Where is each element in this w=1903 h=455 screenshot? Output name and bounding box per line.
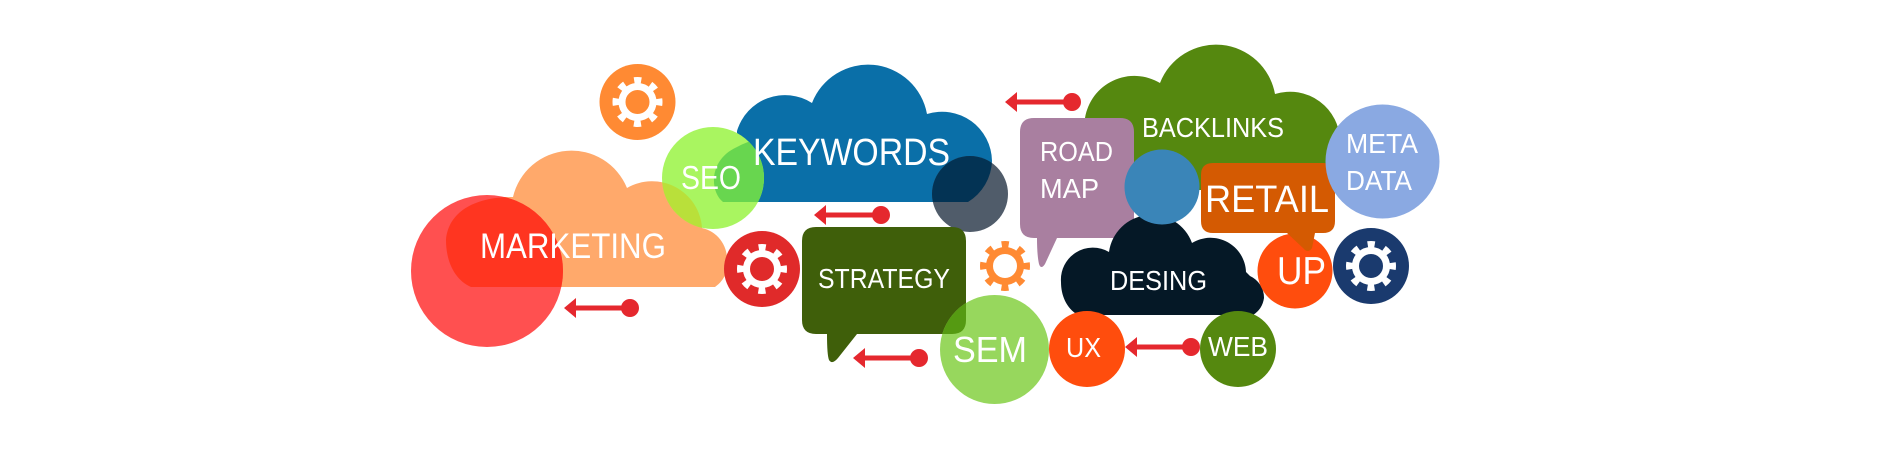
label: ROAD MAP: MAP [1040,173,1099,204]
label: KEYWORDS: KEYWORDS [753,132,950,174]
label: BACKLINKS: BACKLINKS [1142,112,1284,143]
arrow: below marketing [564,298,639,318]
icon: navy gear badge [1333,228,1409,304]
label: META DATA: META [1346,128,1418,159]
label: RETAIL: RETAIL [1205,179,1329,221]
circle: marketing red [411,195,563,347]
icon: orange gear [984,244,1026,288]
circle: UX [1049,311,1125,387]
label: META DATA [1346,128,1418,196]
circle: dark overlap [932,156,1008,232]
circle: UP [1258,234,1332,308]
cloud: desing [1061,215,1264,315]
label: UP: UP [1277,250,1326,293]
label: UX: UX [1066,332,1101,363]
label: ROAD MAP: ROAD [1040,136,1113,167]
label: DESING: DESING [1110,265,1207,296]
icon: red gear badge [724,231,800,307]
circle: blue [1124,150,1200,224]
speech bubble: retail [1201,163,1335,251]
arrow: below keywords [814,205,890,225]
label: WEB: WEB [1208,331,1268,362]
circle: SEM [940,295,1049,404]
arrow: top, left of backlinks [1005,92,1081,112]
label: STRATEGY: STRATEGY [818,263,950,294]
arrow: from web to UX [1125,337,1200,357]
cloud: backlinks [1085,45,1340,190]
speech bubble: road map [1020,118,1134,267]
circle: SEO [662,127,764,229]
icon: orange gear badge [600,64,676,140]
label: MARKETING: MARKETING [480,227,666,266]
cloud: marketing [446,151,727,287]
circle: WEB [1200,311,1276,387]
label: SEM: SEM [953,329,1027,370]
label: META DATA: DATA [1346,165,1412,196]
label: SEO: SEO [681,159,741,196]
arrow: below strategy [853,348,928,368]
label: ROAD MAP [1040,136,1113,204]
speech bubble: strategy [802,227,966,362]
cloud: keywords [714,65,992,202]
circle: meta data [1326,104,1440,218]
